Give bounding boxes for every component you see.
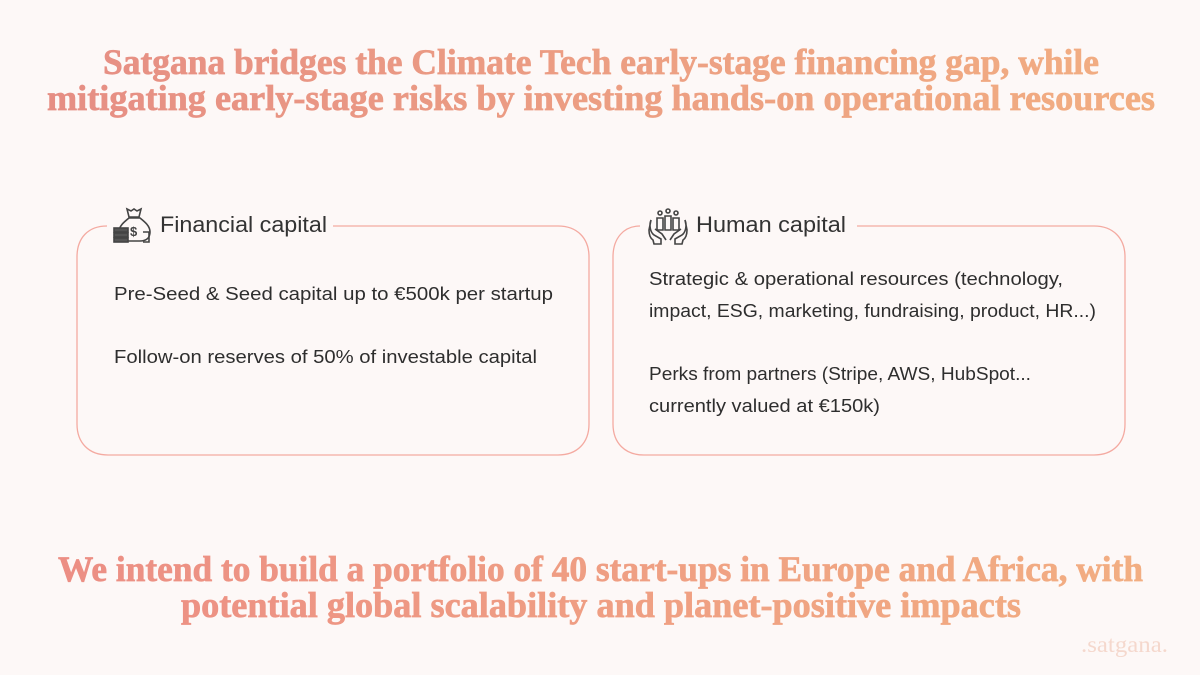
conclusion heading: We intend to build a portfolio of 40 start-ups in Europe and Africa, with	[58, 549, 1143, 589]
panel: human capital	[613, 209, 1125, 455]
icon: money bag	[114, 209, 150, 242]
icon: hands holding people	[649, 209, 687, 244]
text: strategic resources: impact, ESG, marketing, fundraising, product, HR...)	[649, 300, 1096, 321]
title: mitigating early-stage risks by investing hands-on operational resources	[47, 78, 1155, 118]
heading: financial capital: Financial capital	[160, 212, 327, 237]
text: partner perks	[649, 363, 1031, 416]
title	[47, 42, 1155, 118]
panel: financial capital	[77, 209, 589, 455]
text: strategic resources: Strategic & operational resources (technology,	[649, 268, 1063, 289]
text: partner perks: Perks from partners (Stripe, AWS, HubSpot...	[649, 363, 1031, 384]
text: partner perks: currently valued at €150k)	[649, 395, 880, 416]
conclusion heading: potential global scalability and planet-positive impacts	[181, 585, 1021, 625]
logo: satgana: .satgana.	[1081, 632, 1168, 657]
text: follow-on reserves: Follow-on reserves of 50% of investable capital	[114, 346, 537, 367]
heading: human capital: Human capital	[696, 212, 846, 237]
panel outline: human capital	[613, 226, 1125, 455]
panel outline: financial capital	[77, 226, 589, 455]
text: strategic resources	[649, 268, 1096, 321]
icon: dollar sign: $	[130, 224, 138, 239]
title: Satgana bridges the Climate Tech early-stage financing gap, while	[103, 42, 1099, 82]
conclusion heading	[58, 549, 1143, 625]
text: pre-seed capital: Pre-Seed & Seed capital up to €500k per startup	[114, 283, 553, 304]
